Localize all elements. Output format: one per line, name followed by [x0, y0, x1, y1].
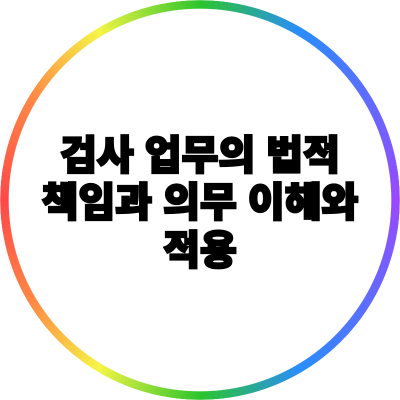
title: 책임과 의무 이해와 [42, 181, 358, 225]
title: 적용 [163, 228, 237, 272]
title: 검사 업무의 법적 [60, 134, 340, 178]
title [41, 134, 358, 272]
